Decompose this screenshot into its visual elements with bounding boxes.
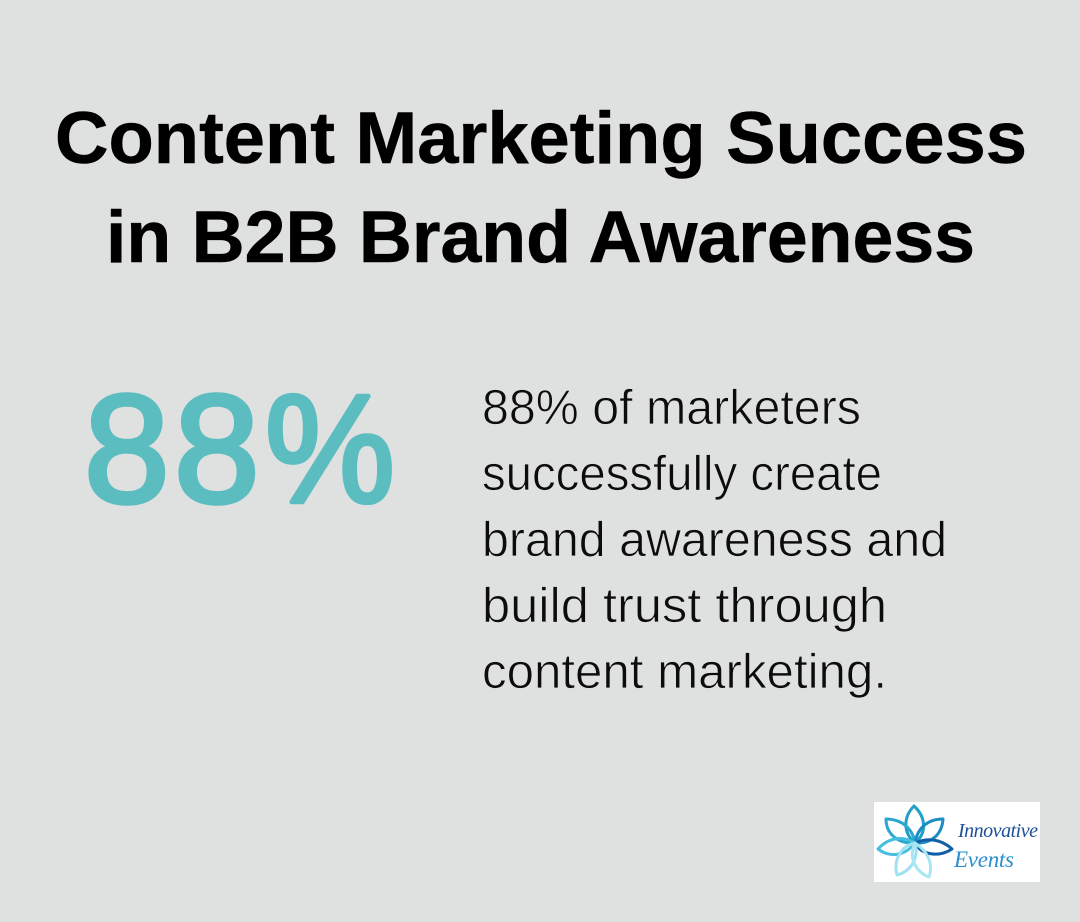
statistic description: content marketing. bbox=[482, 645, 887, 699]
logo: Innovative Events bbox=[874, 802, 1040, 882]
statistic description: 88% of marketers bbox=[482, 381, 861, 435]
logo wordmark: Events bbox=[953, 847, 1014, 872]
big statistic: 88%: 88 bbox=[84, 363, 260, 535]
title: Content Marketing Success bbox=[55, 98, 1027, 179]
logo wordmark: Innovative bbox=[957, 820, 1038, 842]
title: in B2B Brand Awareness bbox=[106, 197, 975, 278]
statistic description: brand awareness and bbox=[482, 513, 947, 567]
statistic description: successfully create bbox=[482, 447, 882, 501]
big statistic: 88%: % bbox=[265, 363, 395, 535]
statistic description: build trust through bbox=[482, 579, 887, 633]
icon: lotus flower bbox=[878, 806, 952, 877]
title bbox=[55, 98, 1027, 278]
logo wordmark bbox=[953, 820, 1038, 872]
statistic description bbox=[482, 381, 947, 699]
big statistic: 88% bbox=[84, 363, 395, 535]
